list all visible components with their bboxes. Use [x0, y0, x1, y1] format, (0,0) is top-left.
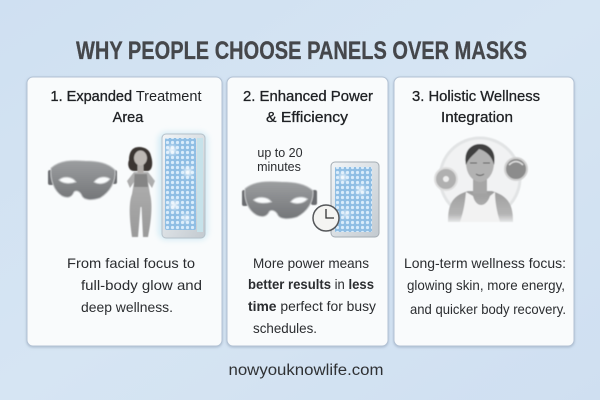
icon: woman figure — [127, 147, 155, 237]
heading: card 3 — [412, 89, 540, 126]
heading: card 3: 3. Holistic Wellness — [412, 89, 540, 105]
body text: card 2: better results in less — [248, 276, 374, 292]
icon: meditating woman with halo — [440, 138, 520, 222]
heading: card 2: 2. Enhanced Power — [243, 89, 373, 105]
heading: card 2: & Efficiency — [266, 110, 349, 126]
icon: right orb — [505, 158, 527, 180]
body text: card 2: time perfect for busy — [248, 298, 376, 314]
icon: LED panel — [331, 162, 379, 237]
footer url: nowyouknowlife.com — [228, 362, 384, 379]
body text: card 2 — [248, 255, 376, 336]
body text: card 3: Long-term wellness focus: — [404, 255, 566, 271]
icon: left orb — [435, 168, 457, 190]
label: up to 20 minutes: minutes — [257, 160, 301, 174]
body text: card 3 — [404, 255, 566, 317]
body text: card 2: More power means — [253, 255, 369, 271]
heading: card 1 — [50, 89, 201, 126]
body text: card 1 — [67, 255, 202, 315]
icon: face mask — [242, 182, 317, 219]
heading: card 3: Integration — [441, 110, 513, 126]
heading: card 2 — [243, 89, 373, 126]
panel: holistic wellness integration — [394, 77, 574, 346]
panel: expanded treatment area — [27, 77, 222, 346]
body text: card 3: glowing skin, more energy, — [407, 277, 565, 293]
body text: card 1: deep wellness. — [81, 299, 173, 315]
body text: card 2: schedules. — [253, 320, 317, 336]
label: up to 20 minutes: up to 20 — [257, 146, 303, 160]
label: up to 20 minutes — [257, 146, 303, 174]
icon: face mask — [48, 161, 117, 200]
panel: enhanced power and efficiency — [227, 77, 388, 346]
icon: full-body LED panel — [158, 132, 208, 240]
heading: card 1: 1. Expanded Treatment — [50, 89, 201, 105]
body text: card 3: and quicker body recovery. — [410, 301, 566, 317]
body text: card 1: From facial focus to — [67, 255, 195, 271]
body text: card 1: full-body glow and — [81, 277, 202, 293]
heading: card 1: Area — [113, 110, 144, 126]
icon: clock — [313, 205, 339, 231]
